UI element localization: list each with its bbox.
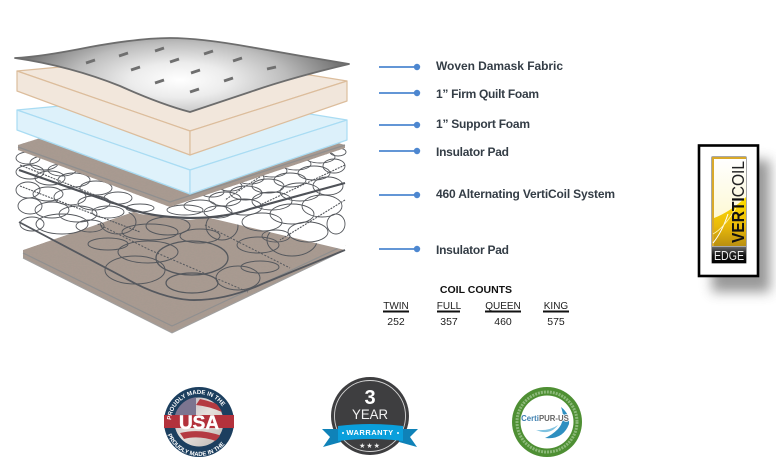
mattress exploded layers (15, 38, 349, 333)
column: queen: 460 (494, 316, 512, 328)
leader: verticoil system (379, 192, 420, 198)
leader: woven damask fabric (379, 64, 420, 70)
badge: 3 year warranty: WARRANTY (346, 428, 394, 437)
column: king: 575 (547, 316, 565, 328)
layer: firm quilt foam (17, 67, 347, 155)
column: queen (485, 301, 521, 328)
badge: verticoil edge logo (699, 146, 770, 292)
layer: lower insulator pad (23, 196, 345, 333)
column: twin: 252 (387, 316, 405, 328)
leader: firm quilt foam (379, 90, 420, 96)
column: full (437, 301, 462, 328)
label: support foam: 1” Support Foam (436, 117, 530, 131)
badge: certipur-us (512, 387, 582, 457)
badge: 3 year warranty: 3 (364, 387, 376, 409)
layer: blue support foam (17, 106, 347, 194)
label: lower insulator pad: Insulator Pad (436, 243, 509, 257)
leader: upper insulator pad (379, 148, 420, 154)
column: full: FULL (437, 301, 462, 312)
column: queen: QUEEN (485, 301, 521, 312)
layer: lower coil frame wire (19, 222, 345, 300)
column: king: KING (544, 301, 568, 312)
badge: made in usa: USA (179, 413, 219, 434)
label: verticoil system: 460 Alternating VertiCoil System (436, 187, 615, 201)
column: twin: TWIN (383, 301, 409, 312)
badge: made in usa: PROUDLY MADE IN THE (168, 433, 225, 456)
badge: verticoil edge logo: EDGE (714, 248, 744, 263)
leader: lower insulator pad (379, 246, 420, 252)
layer: upper coil field (16, 148, 346, 250)
leader: support foam (379, 122, 420, 128)
badge: verticoil edge logo: VERTICOIL (728, 161, 748, 243)
coil counts table (383, 284, 569, 328)
layer: lower coil springs (60, 205, 317, 293)
column: twin (383, 301, 409, 328)
layer: upper coil frame wire (19, 170, 345, 218)
badge: 3 year warranty (322, 377, 418, 455)
badge: certipur-us: CertiPUR-US (521, 414, 569, 423)
badge: made in usa (164, 387, 234, 457)
layer: upper insulator pad (18, 135, 345, 207)
column: king (543, 301, 569, 328)
heading: coil counts: COIL COUNTS (440, 284, 512, 296)
label: firm quilt foam: 1” Firm Quilt Foam (436, 87, 539, 101)
layer: damask fabric (15, 38, 349, 112)
badge: made in usa: PROUDLY MADE IN THE (167, 390, 226, 420)
label: upper insulator pad: Insulator Pad (436, 145, 509, 159)
badge: 3 year warranty: YEAR (352, 406, 388, 422)
badge: 3 year warranty: ★★★ (359, 442, 381, 450)
column: full: 357 (440, 316, 458, 328)
label: woven damask fabric: Woven Damask Fabric (436, 59, 563, 73)
